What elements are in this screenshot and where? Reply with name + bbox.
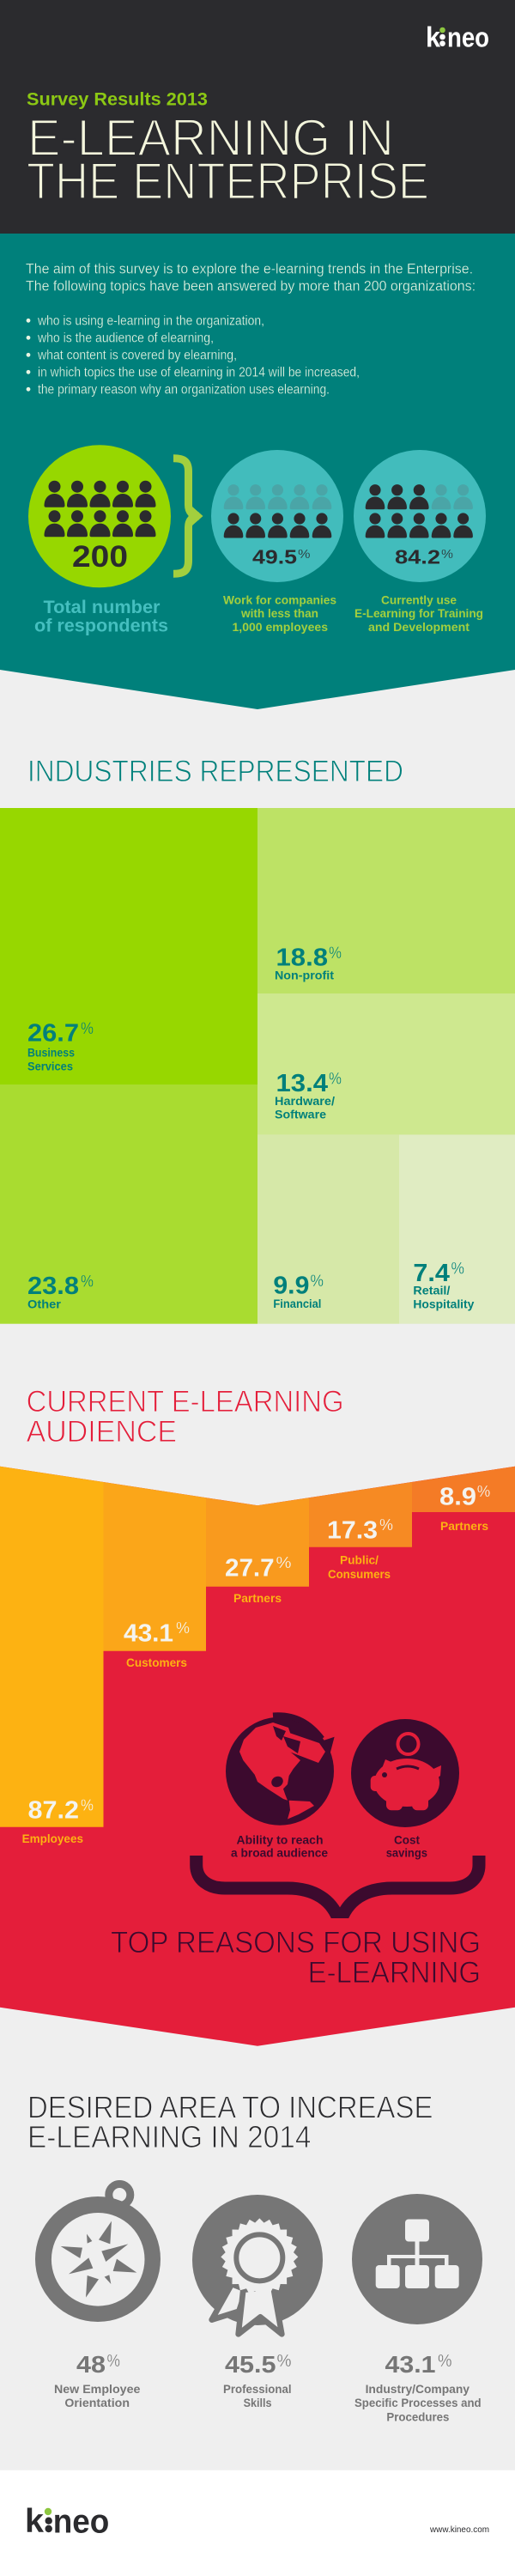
- panel: footer: [0, 2470, 515, 2576]
- icon: people grid: [45, 481, 156, 537]
- caption: total respondents: Total number: [43, 597, 161, 617]
- heading: audience: AUDIENCE: [27, 1415, 177, 1449]
- bar: public consumers: 17.3: [327, 1517, 378, 1545]
- caption: total respondents: [34, 597, 168, 635]
- bar: partners: 27.7: [225, 1555, 275, 1583]
- number: 48: 48: [76, 2351, 106, 2378]
- caption: company processes: [354, 2382, 482, 2423]
- title: [27, 109, 429, 210]
- tile: hardware software: %: [329, 1070, 342, 1088]
- bar: customers: 43.1: [124, 1620, 173, 1648]
- number: 84.2: 84.2: [395, 546, 440, 568]
- caption: new employee: New Employee: [54, 2382, 141, 2396]
- icon: org chart: [352, 2194, 482, 2324]
- tile: retail hospitality: Retail/: [413, 1284, 451, 1297]
- bar: partners: Partners: [233, 1591, 282, 1605]
- logo: kineo top: [426, 21, 489, 52]
- subtitle: Survey Results 2013: [27, 90, 208, 110]
- tile: other: %: [81, 1273, 94, 1291]
- number: 48: %: [106, 2352, 120, 2371]
- bar: customers: %: [176, 1619, 190, 1637]
- tile: hardware software: [258, 993, 515, 1135]
- stat: 200 respondents: [28, 445, 171, 635]
- number: 45.5: 45.5: [225, 2351, 276, 2378]
- tile: business services: [0, 808, 258, 1084]
- caption: company processes: Industry/Company: [366, 2382, 470, 2396]
- caption: total respondents: of respondents: [34, 615, 168, 635]
- caption: professional skills: Professional: [223, 2382, 292, 2396]
- panel: header: [0, 0, 515, 234]
- tile: financial: 9.9: [273, 1273, 309, 1300]
- number: 45.5: %: [276, 2352, 292, 2371]
- bracket: green: [173, 459, 203, 574]
- tile: non-profit: Non-profit: [275, 969, 334, 982]
- website: www.kineo.com: [429, 2524, 489, 2535]
- tile: financial: [258, 1135, 399, 1324]
- tile: retail hospitality: [399, 1135, 515, 1324]
- tile: other: [0, 1084, 258, 1324]
- number: 49.5: [252, 546, 311, 568]
- caption: broad audience: [231, 1832, 328, 1860]
- logo: kineo top: neo: [447, 21, 489, 52]
- caption: professional skills: [223, 2382, 292, 2409]
- stat: professional skills: [192, 2195, 323, 2409]
- bullet list: in which topics the use of elearning in 2014 will be increased,: [38, 365, 360, 380]
- icon: globe: [226, 1716, 335, 1826]
- tile: hardware software: Hardware/: [275, 1094, 335, 1108]
- panel: audience: [0, 1467, 515, 2046]
- treemap: industries: [0, 808, 515, 1324]
- heading: top reasons: [111, 1926, 481, 1990]
- heading: top reasons: TOP REASONS FOR USING: [111, 1926, 481, 1959]
- caption: broad audience: a broad audience: [231, 1846, 328, 1860]
- tile: business services: %: [81, 1020, 94, 1038]
- caption: training use: Currently use: [381, 592, 457, 606]
- number: 84.2: [395, 546, 453, 568]
- tile: non-profit: [258, 808, 515, 993]
- caption: cost savings: savings: [386, 1846, 427, 1860]
- heading: audience: [27, 1385, 344, 1449]
- bar: customers: [103, 1482, 206, 1669]
- caption: company processes: Procedures: [386, 2409, 450, 2423]
- caption: training use: E-Learning for Training: [354, 606, 483, 620]
- bar: public consumers: Consumers: [328, 1567, 391, 1581]
- tile: retail hospitality: %: [451, 1261, 464, 1278]
- bar: public consumers: [309, 1482, 412, 1581]
- tile: retail hospitality: Hospitality: [413, 1297, 475, 1311]
- bullet list: the primary reason why an organization uses elearning.: [38, 382, 330, 397]
- number: 49.5: %: [298, 547, 311, 562]
- number: 49.5: 49.5: [252, 546, 297, 568]
- caption: broad audience: Ability to reach: [237, 1832, 323, 1846]
- bar: partners 8.9: [412, 1467, 515, 1533]
- bar: partners 8.9: %: [477, 1483, 490, 1500]
- heading: desired area: [27, 2089, 433, 2154]
- bar: partners: [206, 1498, 309, 1605]
- caption: company size: 1,000 employees: [232, 620, 328, 634]
- icon: compass: [35, 2184, 161, 2322]
- tile: other: 23.8: [27, 1273, 79, 1300]
- bullet list: [27, 313, 360, 397]
- bar: partners: %: [276, 1554, 292, 1571]
- caption: company processes: Specific Processes and: [354, 2396, 482, 2409]
- number: 84.2: %: [441, 547, 453, 562]
- bullet list: who is using e-learning in the organization,: [37, 313, 264, 328]
- caption: new employee: [54, 2382, 141, 2409]
- number: 43.1: %: [438, 2352, 452, 2371]
- caption: training use: and Development: [368, 620, 470, 634]
- caption: company size: with less than: [240, 606, 318, 620]
- bar: employees: [0, 1467, 103, 1845]
- stat: new employee orientation: [35, 2184, 161, 2409]
- bullet list: who is the audience of elearning,: [37, 331, 214, 345]
- heading: industries: INDUSTRIES REPRESENTED: [27, 755, 403, 788]
- logo: kineo bottom: neo: [53, 2503, 109, 2540]
- logo: kineo top: k: [426, 21, 441, 52]
- caption: new employee: Orientation: [64, 2396, 130, 2409]
- number: 48: [76, 2351, 120, 2378]
- caption: company size: Work for companies: [223, 592, 336, 606]
- tile: hardware software: 13.4: [276, 1070, 328, 1097]
- intro paragraph: The aim of this survey is to explore the e-learning trends in the Enterprise.: [26, 260, 473, 276]
- tile: other: Other: [27, 1297, 62, 1311]
- tile: business services: Business: [27, 1046, 75, 1060]
- bar: employees: Employees: [22, 1832, 83, 1845]
- heading: desired area: DESIRED AREA TO INCREASE: [27, 2089, 433, 2124]
- stat: company processes: [352, 2194, 482, 2423]
- icon: rosette: [192, 2195, 323, 2334]
- caption: cost savings: [386, 1832, 427, 1860]
- intro paragraph: The following topics have been answered by more than 200 organizations:: [26, 277, 476, 294]
- bar: employees: 87.2: [27, 1796, 79, 1824]
- bar: customers: Customers: [126, 1656, 187, 1669]
- caption: professional skills: Skills: [244, 2396, 272, 2409]
- stat: 84.2 percent: [354, 450, 486, 634]
- number: 43.1: 43.1: [385, 2351, 436, 2378]
- heading: audience: CURRENT E-LEARNING: [27, 1385, 344, 1419]
- intro paragraph: [26, 260, 476, 294]
- bar: employees: %: [81, 1796, 94, 1814]
- tile: non-profit: %: [329, 945, 342, 963]
- icon: people 49.5: [224, 484, 331, 538]
- tile: hardware software: Software: [275, 1108, 326, 1121]
- heading: desired area: E-LEARNING IN 2014: [27, 2119, 311, 2154]
- title: THE ENTERPRISE: [27, 153, 429, 210]
- tile: business services: Services: [27, 1060, 73, 1073]
- title: E-LEARNING IN: [27, 109, 394, 167]
- icon: piggy bank: [351, 1719, 459, 1827]
- caption: cost savings: Cost: [394, 1832, 420, 1846]
- stat: 49.5 percent: [211, 450, 343, 634]
- bullet list: what content is covered by elearning,: [37, 348, 237, 362]
- tile: non-profit: 18.8: [276, 945, 328, 972]
- bar: partners 8.9: Partners: [440, 1519, 488, 1533]
- caption: company size: [223, 592, 336, 634]
- logo: kineo bottom: [25, 2503, 109, 2540]
- logo: kineo bottom: k: [25, 2503, 44, 2540]
- caption: training use: [354, 592, 483, 634]
- bracket: top reasons: [197, 1856, 479, 1930]
- tile: business services: 26.7: [27, 1020, 79, 1048]
- tile: financial: Financial: [273, 1297, 321, 1310]
- tile: financial: %: [311, 1273, 324, 1291]
- bar: partners 8.9: 8.9: [439, 1483, 476, 1510]
- bar: public consumers: Public/: [340, 1553, 379, 1567]
- icon: people 84.2: [366, 484, 473, 538]
- tile: retail hospitality: 7.4: [413, 1260, 450, 1287]
- panel: survey intro: [0, 234, 515, 709]
- heading: top reasons: E-LEARNING: [308, 1956, 481, 1990]
- bar: public consumers: %: [379, 1516, 393, 1534]
- number: 43.1: [385, 2351, 452, 2378]
- number: 200: 200: [72, 540, 128, 574]
